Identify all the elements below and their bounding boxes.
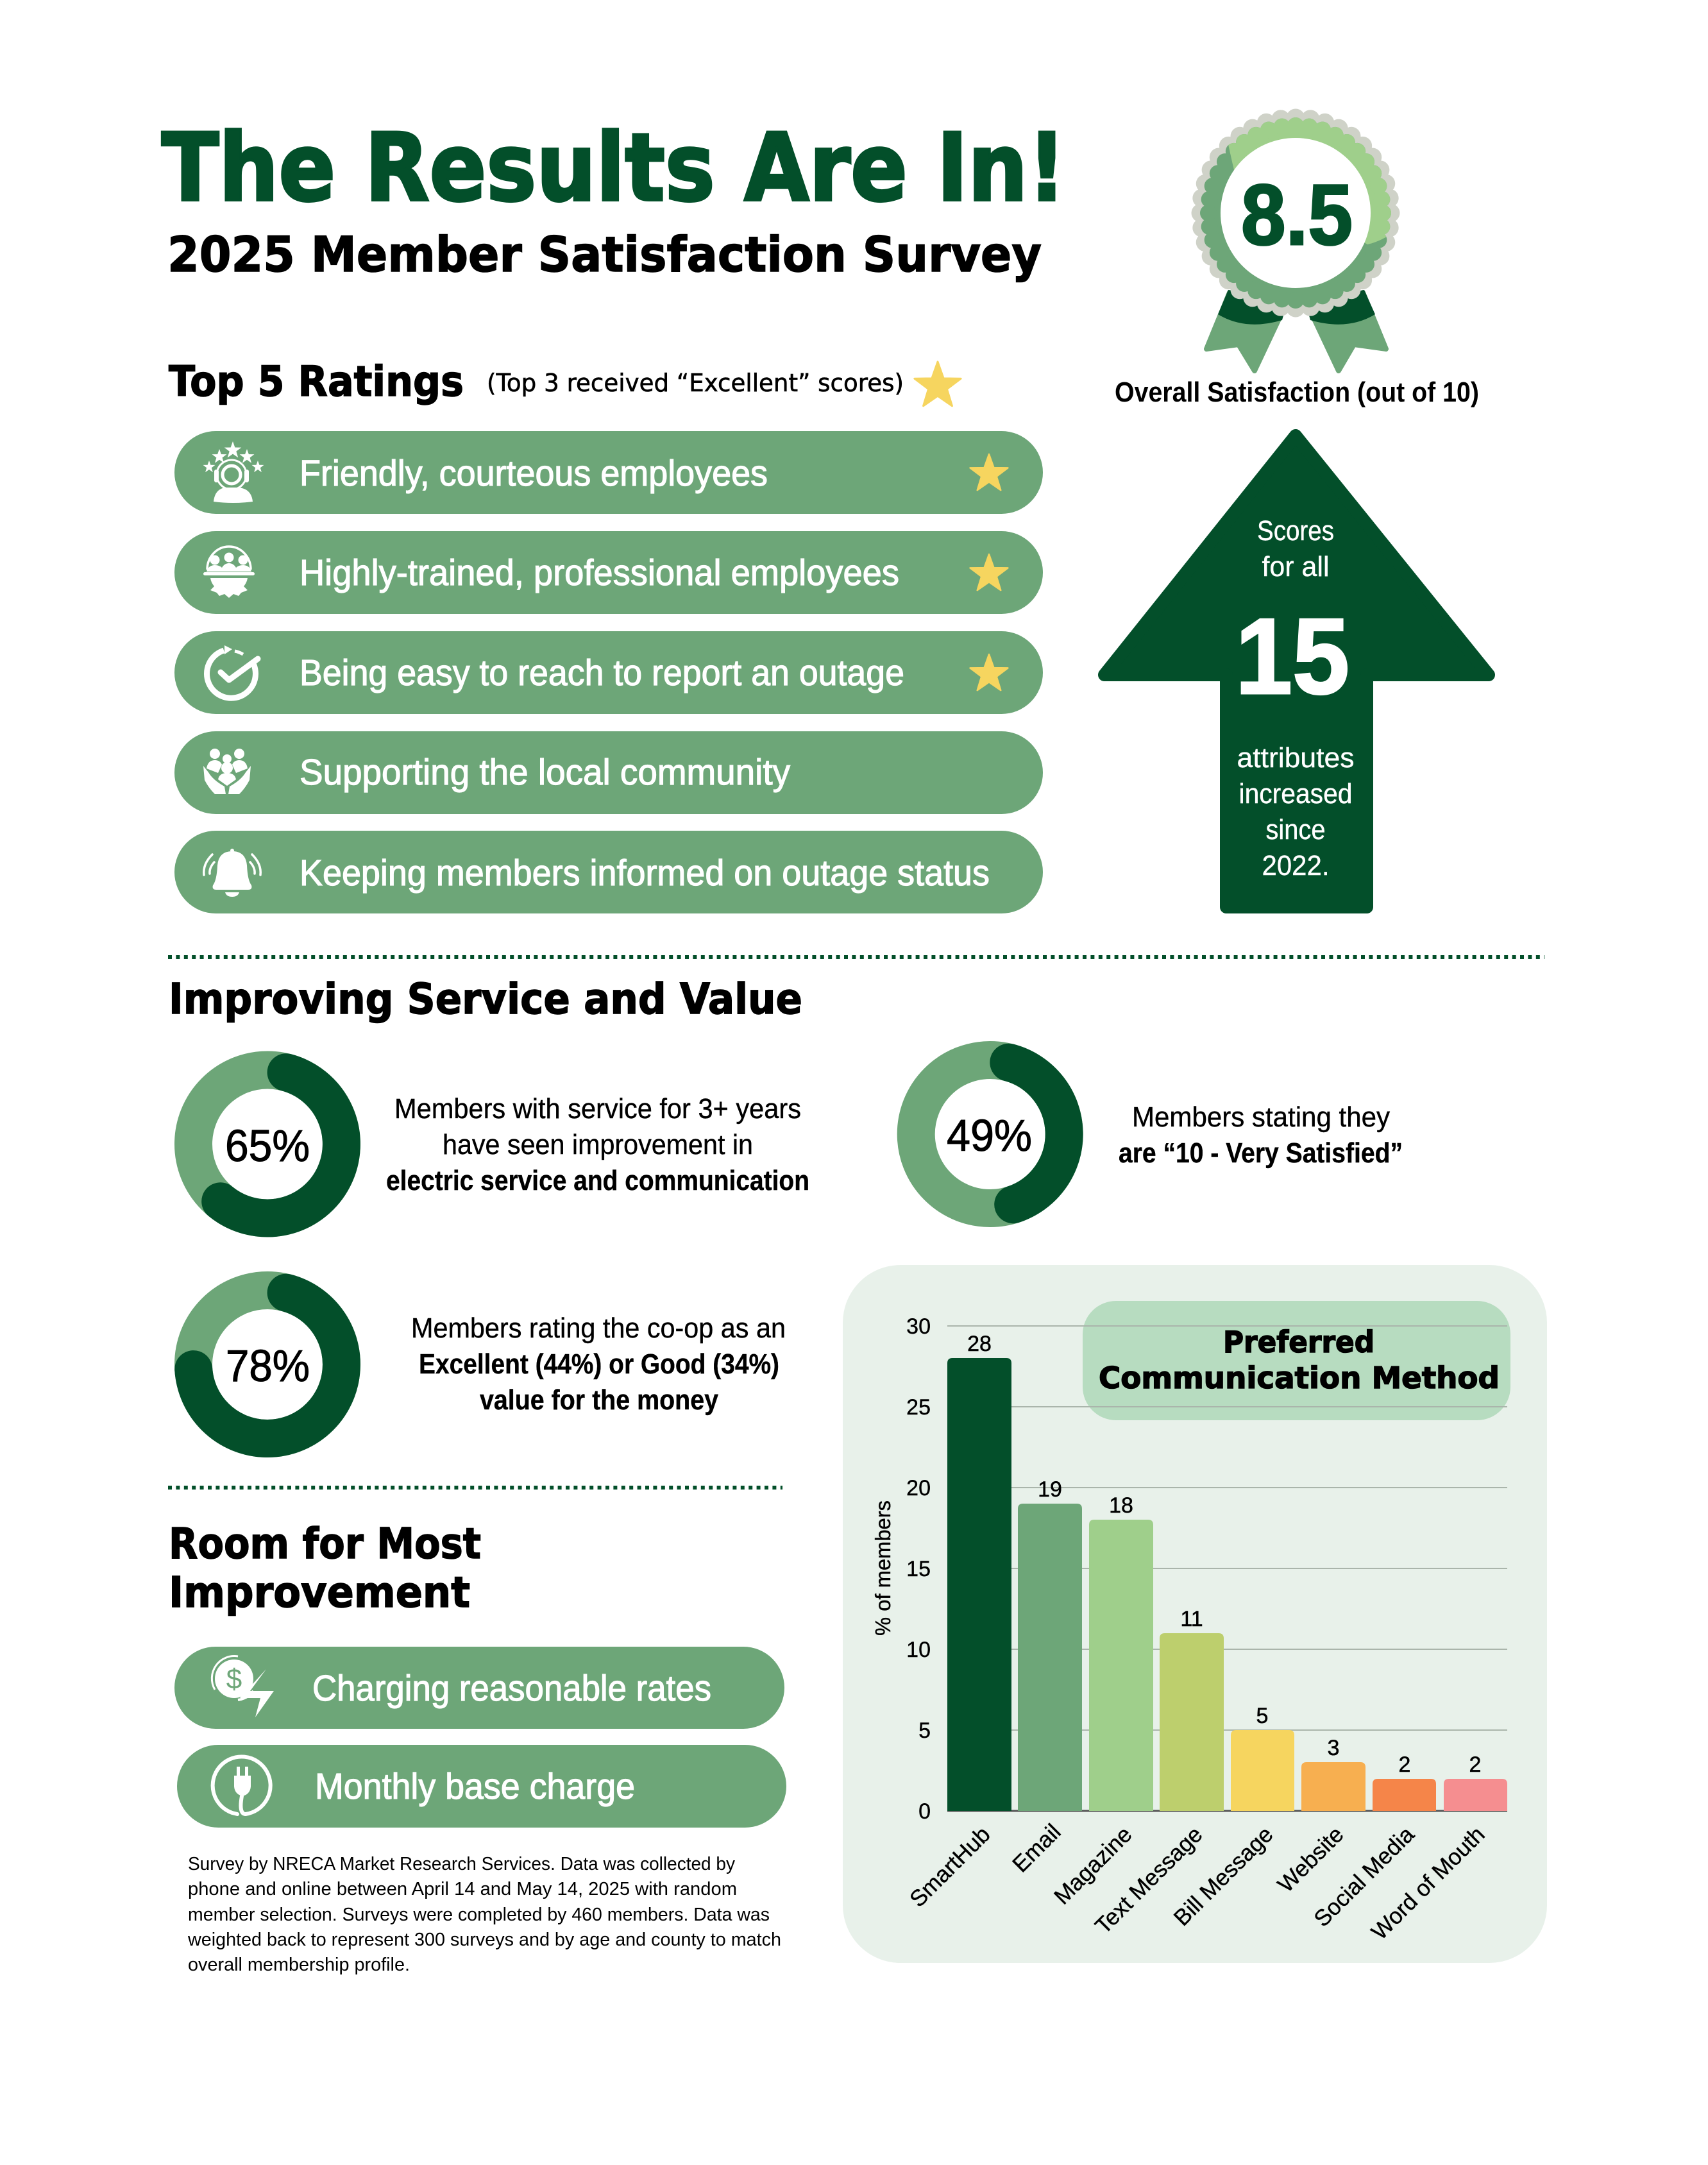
bar values: 19 bbox=[1038, 1477, 1062, 1502]
footnote: member selection. Surveys were completed by 460 members. Data was bbox=[188, 1905, 770, 1925]
chart title: Preferred bbox=[1223, 1325, 1374, 1359]
chart title box bbox=[1083, 1301, 1510, 1420]
bar values: 2 bbox=[1399, 1753, 1410, 1777]
footnote bbox=[187, 1854, 781, 1975]
icon: star bbox=[970, 454, 1008, 490]
arrow text bottom: 2022. bbox=[1262, 850, 1329, 881]
icon: electric plug bbox=[213, 1756, 271, 1814]
donut: 49%: 49% bbox=[947, 1110, 1032, 1160]
y axis labels bbox=[906, 1314, 931, 1824]
y axis labels: 15 bbox=[906, 1557, 931, 1581]
rating pill 3 bbox=[174, 631, 1043, 714]
improvement pill 1 bbox=[174, 1647, 784, 1729]
arrow text bottom bbox=[1237, 742, 1355, 881]
arrow text top: Scores bbox=[1257, 515, 1334, 547]
rating pill 4: Supporting the local community bbox=[300, 752, 790, 793]
category labels: SmartHub bbox=[904, 1821, 995, 1912]
text: service improvement: electric service and communication bbox=[386, 1165, 809, 1196]
y axis labels: 0 bbox=[918, 1799, 931, 1824]
heading: improving service and value: Improving Service and Value bbox=[169, 974, 802, 1024]
bar values: 5 bbox=[1256, 1704, 1268, 1728]
rating pill 3: Being easy to reach to report an outage bbox=[300, 652, 904, 693]
panel: top ratings list bbox=[174, 431, 1043, 913]
y axis labels: 30 bbox=[906, 1314, 931, 1339]
badge body bbox=[1205, 123, 1386, 303]
y axis labels: 5 bbox=[918, 1719, 931, 1743]
icon: employee with stars bbox=[203, 441, 264, 503]
subtitle: 2025 Member Satisfaction Survey bbox=[167, 226, 1042, 283]
icon: circular check bbox=[207, 645, 258, 698]
bar values bbox=[967, 1332, 1481, 1777]
scalloped rim bbox=[1198, 115, 1393, 310]
donut: 65%: 65% bbox=[225, 1121, 310, 1171]
category labels: Magazine bbox=[1049, 1821, 1137, 1910]
text: value for the money: Excellent (44%) or Good (34%) bbox=[419, 1348, 779, 1380]
bars bbox=[947, 1358, 1507, 1811]
footnote: overall membership profile. bbox=[188, 1955, 410, 1975]
bar values: 18 bbox=[1109, 1493, 1133, 1518]
category labels: Text Message bbox=[1090, 1821, 1208, 1939]
text: very satisfied: Members stating they bbox=[1132, 1101, 1390, 1133]
text: value for the money: value for the money bbox=[480, 1384, 718, 1416]
text: value for the money: Members rating the co-op as an bbox=[411, 1312, 786, 1344]
y axis title: % of members bbox=[871, 1500, 895, 1636]
heading: room for most improvement: Improvement bbox=[169, 1568, 470, 1617]
rating pill 1 bbox=[174, 431, 1043, 514]
arrow text top: for all bbox=[1262, 551, 1329, 582]
y axis labels: 10 bbox=[906, 1638, 931, 1662]
heading: top 5 ratings: Top 5 Ratings bbox=[169, 358, 464, 406]
category labels: Email bbox=[1008, 1819, 1066, 1877]
panel: scores arrow bbox=[1104, 436, 1489, 907]
rating pill 4 bbox=[174, 731, 1043, 814]
rating pill 5: Keeping members informed on outage status bbox=[300, 853, 990, 894]
text: service improvement bbox=[386, 1093, 809, 1196]
text: very satisfied bbox=[1119, 1101, 1403, 1169]
bar values: 11 bbox=[1180, 1607, 1203, 1631]
rating pill 1: Friendly, courteous employees bbox=[300, 453, 768, 494]
text: very satisfied: are “10 - Very Satisfied” bbox=[1119, 1137, 1403, 1169]
ribbon tails bbox=[1206, 293, 1386, 371]
number 15: 15 bbox=[1235, 596, 1349, 717]
chart title: Communication Method bbox=[1099, 1361, 1500, 1395]
donut: 78% bbox=[194, 1291, 341, 1438]
icon: star bbox=[970, 554, 1008, 590]
title: The Results Are In! bbox=[162, 114, 1066, 223]
category labels: Website bbox=[1273, 1821, 1349, 1898]
bar values: 28 bbox=[967, 1332, 992, 1356]
donut: 65% bbox=[194, 1070, 341, 1218]
arrow shape bbox=[1104, 436, 1489, 907]
rating pill 2: Highly-trained, professional employees bbox=[300, 552, 899, 593]
category labels: Bill Message bbox=[1169, 1821, 1278, 1931]
score: 8.5 bbox=[1241, 167, 1353, 263]
badge centre bbox=[1221, 138, 1371, 288]
footnote: phone and online between April 14 and May 14, 2025 with random bbox=[188, 1879, 737, 1899]
panel: overall satisfaction badge bbox=[1198, 115, 1393, 371]
label: overall satisfaction: Overall Satisfaction (out of 10) bbox=[1115, 377, 1479, 408]
donut: 78%: 78% bbox=[226, 1341, 310, 1391]
icon: coin and bolt: $ bbox=[226, 1663, 242, 1695]
category labels: Social Media bbox=[1309, 1821, 1419, 1932]
ribbon shadows bbox=[1218, 290, 1375, 325]
footnote: weighted back to represent 300 surveys and by age and county to match bbox=[187, 1930, 781, 1950]
improvement pill 1: Charging reasonable rates bbox=[312, 1668, 711, 1709]
heading: room for most improvement bbox=[169, 1519, 481, 1617]
arrow text bottom: since bbox=[1266, 814, 1325, 845]
bar values: 2 bbox=[1469, 1753, 1481, 1777]
icon: ringing bell bbox=[204, 849, 260, 897]
heading: room for most improvement: Room for Most bbox=[169, 1519, 481, 1568]
icon: star bbox=[970, 654, 1008, 690]
icon: hands holding people bbox=[203, 749, 251, 794]
icon: team and gear bbox=[203, 547, 255, 598]
note: top 3 excellent scores: (Top 3 received “Excellent” scores) bbox=[487, 369, 904, 397]
improvement pill 2 bbox=[177, 1745, 786, 1828]
footnote: Survey by NRECA Market Research Services. Data was collected by bbox=[188, 1854, 735, 1874]
category labels bbox=[904, 1819, 1490, 1945]
arrow text bottom: attributes bbox=[1237, 742, 1355, 774]
improvement pill 2: Monthly base charge bbox=[315, 1766, 635, 1807]
y axis labels: 25 bbox=[906, 1395, 931, 1420]
text: service improvement: have seen improvement in bbox=[443, 1129, 753, 1160]
y axis labels: 20 bbox=[906, 1476, 931, 1500]
chart title bbox=[1099, 1325, 1500, 1395]
text: value for the money bbox=[411, 1312, 786, 1416]
rating pill 2 bbox=[174, 531, 1043, 614]
icon: coin and bolt bbox=[212, 1656, 274, 1717]
text: service improvement: Members with service for 3+ years bbox=[394, 1093, 801, 1125]
arrow text bottom: increased bbox=[1239, 778, 1352, 810]
bar values: 3 bbox=[1328, 1736, 1339, 1760]
arrow text top bbox=[1257, 515, 1334, 582]
chart background bbox=[843, 1265, 1547, 1963]
rating pill 5 bbox=[174, 831, 1043, 913]
icon: large star bbox=[915, 362, 961, 406]
panel: preferred communication method chart bbox=[843, 1265, 1547, 1963]
category labels: Word of Mouth bbox=[1366, 1821, 1490, 1945]
donut: 49% bbox=[916, 1060, 1064, 1209]
